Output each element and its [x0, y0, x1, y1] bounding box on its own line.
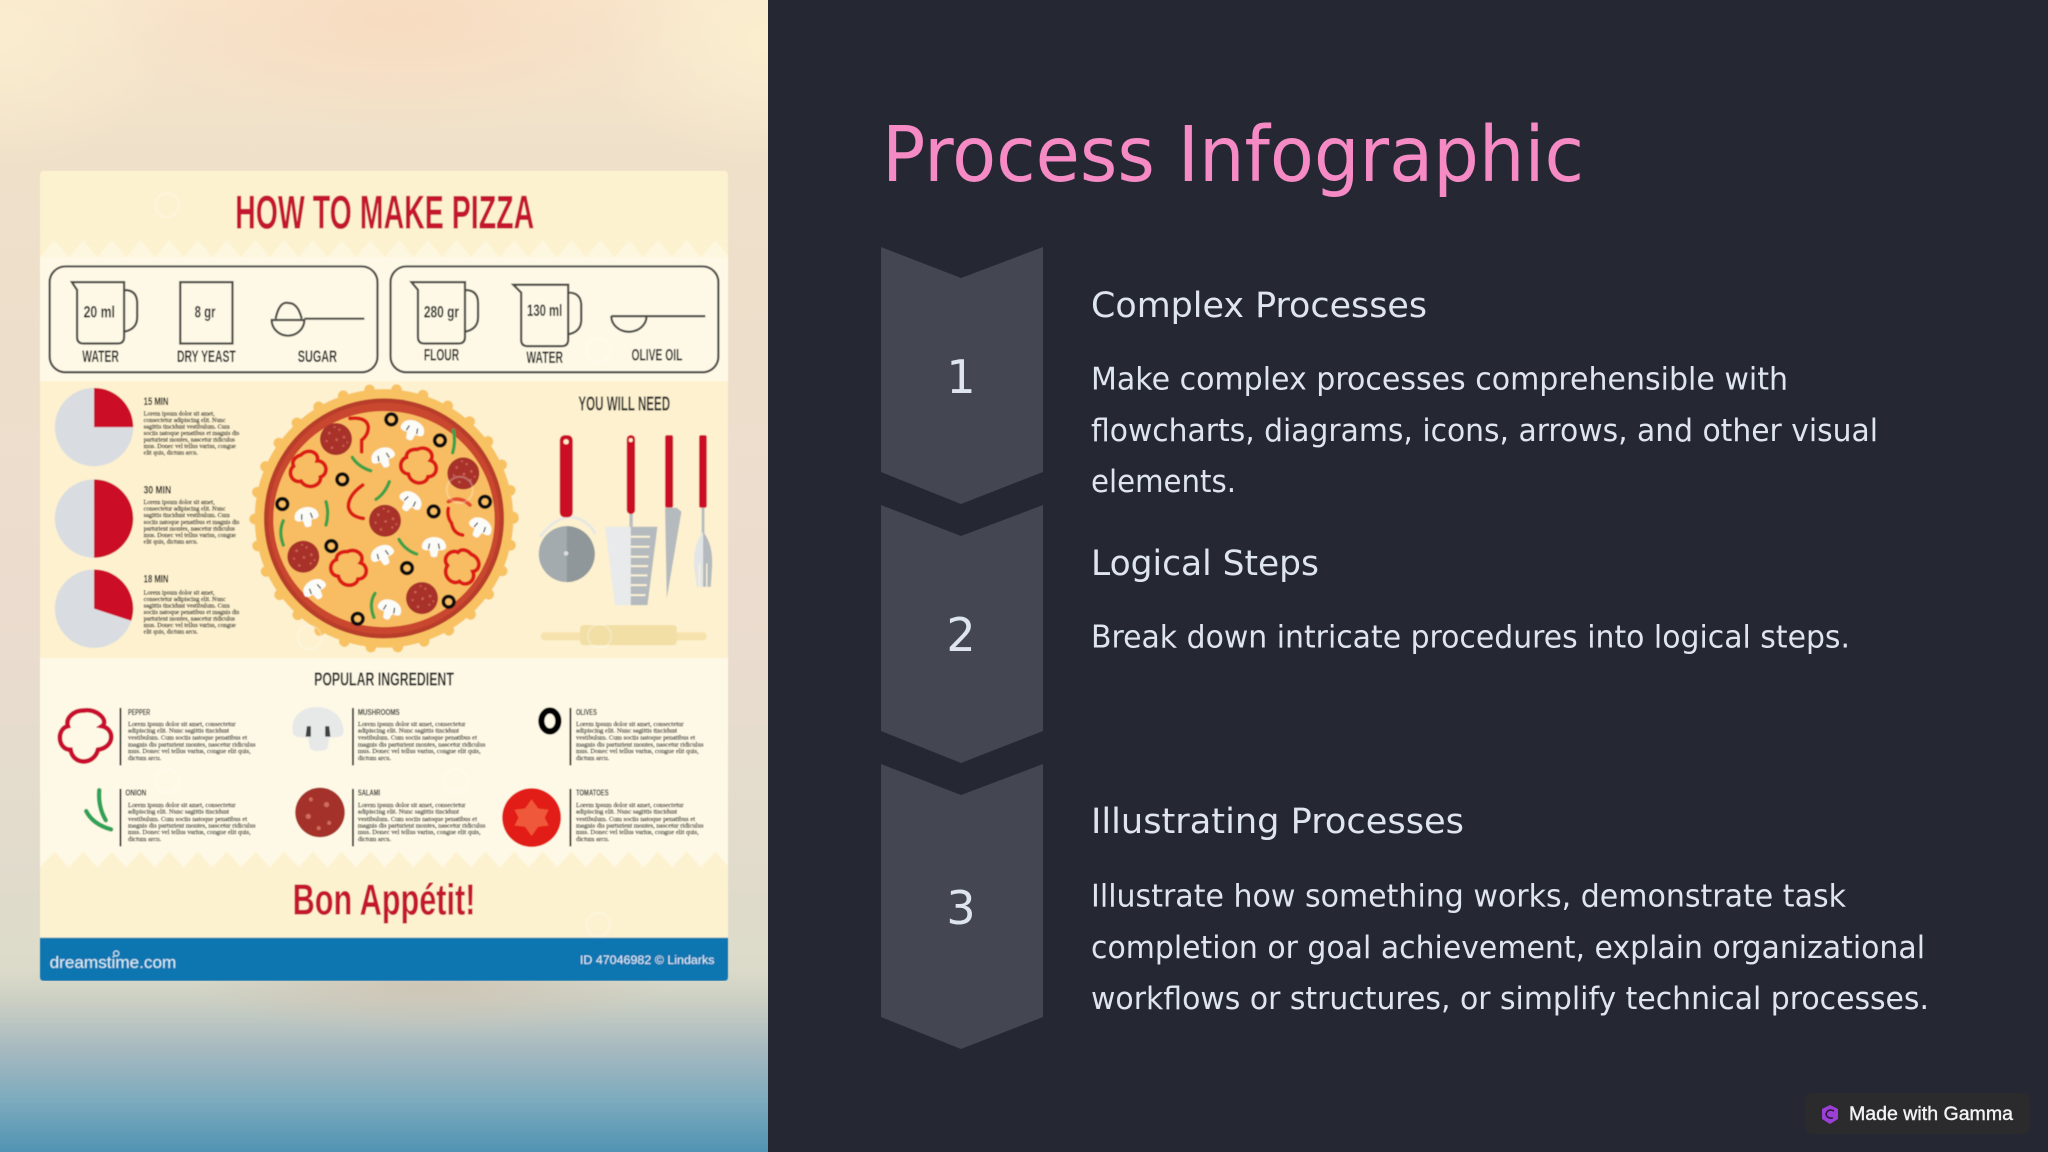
label: water 2: WATER [526, 349, 563, 367]
ingredient: onion [86, 787, 256, 846]
label: dry yeast: DRY YEAST [177, 348, 236, 366]
text: 18 min: mus. Donec vel tellus varius, congue [144, 622, 236, 629]
text: 30 min [144, 485, 240, 545]
ingredient: olives: Lorem ipsum dolor sit amet, consectetur [576, 721, 684, 728]
footer logo text: dreamstime.com [50, 954, 176, 972]
ingredient: onion: magnis dis parturient montes, nascetur ridiculus [128, 822, 256, 829]
closing text: bon appetit: Bon Appétit! [293, 876, 475, 924]
panel: process steps [881, 111, 2014, 1125]
text: 30 min: elit quis, dictum arcu. [144, 538, 198, 545]
step 1 [881, 247, 1878, 504]
ingredient: mushrooms: dictum arcu. [358, 755, 391, 762]
ingredient: salami [295, 787, 486, 846]
ingredient: pepper [60, 707, 256, 765]
body: step 3: completion or goal achievement, explain organizational [1091, 930, 1925, 966]
body: step 2: Break down intricate procedures into logical steps. [1091, 620, 1850, 656]
ingredient: pepper: Lorem ipsum dolor sit amet, consectetur [128, 721, 236, 728]
ingredient box: flour, water, olive oil [391, 266, 718, 372]
ingredient: onion: mus. Donec vel tellus varius, congue elit quis, [128, 829, 251, 836]
ingredient: olives: adipiscing elit. Nunc sagittis tincidunt [576, 728, 677, 735]
chevron 3 [881, 764, 1043, 1049]
text: 15 min: consectetur adipiscing elit. Nunc [144, 417, 226, 424]
watermarks [155, 193, 611, 936]
ingredient: onion: adipiscing elit. Nunc sagittis tincidunt [128, 809, 229, 816]
icon: spatula [605, 435, 657, 605]
icon: flour cup [411, 282, 478, 344]
text: 15 min: sagittis tincidunt vestibulum. Cum [144, 423, 230, 430]
badge text: Made with Gamma [1849, 1104, 2013, 1125]
ingredient: onion: vestibulum. Cum sociis natoque penatibus et [128, 816, 247, 823]
icon: yeast packet [180, 282, 232, 344]
text: 18 min: consectetur adipiscing elit. Nunc [144, 596, 226, 603]
ingredient box: water, yeast, sugar [50, 266, 377, 372]
illustration: pizza [255, 389, 513, 648]
label: sugar: SUGAR [298, 348, 337, 366]
label: 20 ml: 20 ml [84, 302, 115, 321]
icon: water cup [72, 282, 137, 344]
text: 30 min: sociis natoque penatibus et magnis dis [144, 519, 240, 526]
chevron 2 [881, 505, 1043, 763]
heading: you will need: YOU WILL NEED [578, 393, 670, 416]
ingredient: olives: mus. Donec vel tellus varius, congue elit quis, [576, 748, 699, 755]
ingredient: olives: dictum arcu. [576, 755, 610, 762]
ingredient: salami: SALAMI [358, 787, 380, 797]
ingredient: mushrooms: adipiscing elit. Nunc sagittis tincidunt [358, 728, 459, 735]
image background bands [40, 171, 728, 981]
ingredient: tomatoes: TOMATOES [576, 787, 609, 797]
ingredient: mushrooms: magnis dis parturient montes, nascetur ridiculus [358, 741, 486, 748]
text: 15 min: Lorem ipsum dolor sit amet, [144, 410, 215, 417]
ingredient: salami: mus. Donec vel tellus varius, congue elit quis, [358, 829, 481, 836]
icon: sugar spoon [272, 303, 364, 336]
ingredient: onion: Lorem ipsum dolor sit amet, consectetur [128, 802, 236, 809]
chevron 1 [881, 247, 1043, 504]
panel: blurred image background [0, 0, 768, 1152]
text: 30 min: 30 MIN [144, 485, 171, 497]
heading: illustrating processes: Illustrating Processes [1091, 802, 1464, 842]
body: step 3: Illustrate how something works, demonstrate task [1091, 878, 1846, 914]
text: 15 min [144, 396, 240, 457]
ingredient: tomatoes: magnis dis parturient montes, nascetur ridiculus [576, 822, 704, 829]
number 1: 1 [946, 350, 976, 404]
ingredient: olives [541, 707, 704, 765]
icon: rolling pin [541, 625, 707, 645]
ingredient: olives: vestibulum. Cum sociis natoque penatibus et [576, 734, 695, 741]
text: 15 min: mus. Donec vel tellus varius, congue [144, 443, 236, 450]
time charts [55, 388, 240, 648]
ingredient: mushrooms: MUSHROOMS [358, 707, 400, 717]
body: step 3: workflows or structures, or simplify technical processes. [1091, 981, 1929, 1017]
ingredient: tomatoes: mus. Donec vel tellus varius, congue elit quis, [576, 829, 699, 836]
ingredient: pepper: mus. Donec vel tellus varius, congue elit quis, [128, 748, 251, 755]
ingredient: tomatoes: Lorem ipsum dolor sit amet, consectetur [576, 802, 684, 809]
text: 18 min: elit quis, dictum arcu. [144, 628, 198, 635]
label: 8 gr: 8 gr [195, 302, 216, 321]
icon: gamma logo [1822, 1105, 1838, 1124]
body: step 1: elements. [1091, 464, 1236, 500]
section: popular ingredient [60, 669, 704, 847]
label: flour: FLOUR [424, 346, 459, 364]
icon: water cup 2 [513, 285, 581, 346]
badge: made with gamma [1805, 1093, 2030, 1134]
text: 30 min: Lorem ipsum dolor sit amet, [144, 499, 215, 506]
label: 280 gr: 280 gr [424, 302, 459, 321]
footer image id: ID 47046982 © Lindarks [580, 953, 714, 967]
ingredient: mushrooms: mus. Donec vel tellus varius, congue elit quis, [358, 748, 481, 755]
ingredient: salami: magnis dis parturient montes, nascetur ridiculus [358, 822, 486, 829]
ingredient: tomatoes [502, 787, 704, 847]
text: 15 min: 15 MIN [144, 396, 168, 408]
image title: HOW TO MAKE PIZZA [235, 186, 534, 239]
heading: popular ingredient: POPULAR INGREDIENT [314, 669, 454, 690]
ingredient: pepper: dictum arcu. [128, 755, 162, 762]
ingredient: olives: magnis dis parturient montes, nascetur ridiculus [576, 741, 704, 748]
ingredient: salami: adipiscing elit. Nunc sagittis tincidunt [358, 809, 459, 816]
text: 30 min: consectetur adipiscing elit. Nunc [144, 506, 226, 513]
ingredient: salami: Lorem ipsum dolor sit amet, consectetur [358, 802, 466, 809]
tools section [539, 393, 712, 645]
label: olive oil: OLIVE OIL [632, 346, 682, 364]
text: 18 min: Lorem ipsum dolor sit amet, [144, 589, 215, 596]
step 2 [881, 505, 1850, 763]
footer logo mark [114, 951, 119, 956]
ingredient: pepper: magnis dis parturient montes, nascetur ridiculus [128, 741, 256, 748]
ingredient: onion: dictum arcu. [128, 836, 162, 843]
ingredient: olives: OLIVES [576, 707, 597, 717]
pie: 30 min [55, 479, 133, 558]
ingredient: pepper: adipiscing elit. Nunc sagittis tincidunt [128, 728, 229, 735]
ingredient: tomatoes: dictum arcu. [576, 836, 610, 843]
text: 18 min [144, 574, 240, 635]
body: step 1: flowcharts, diagrams, icons, arrows, and other visual [1091, 413, 1878, 449]
text: 15 min: elit quis, dictum arcu. [144, 450, 198, 457]
ingredient: mushrooms: vestibulum. Cum sociis natoque penatibus et [358, 734, 477, 741]
ingredient: tomatoes: adipiscing elit. Nunc sagittis tincidunt [576, 809, 677, 816]
icon: pizza cutter [539, 435, 595, 582]
pie: 15 min [55, 388, 133, 466]
pie: 18 min [55, 569, 133, 648]
label: 130 ml: 130 ml [527, 301, 562, 320]
text: 30 min: sagittis tincidunt vestibulum. Cum [144, 512, 230, 519]
ingredient: salami: vestibulum. Cum sociis natoque penatibus et [358, 816, 477, 823]
text: 30 min: mus. Donec vel tellus varius, congue [144, 532, 236, 539]
text: 18 min: sociis natoque penatibus et magnis dis [144, 609, 240, 616]
text: 18 min: 18 MIN [144, 574, 168, 586]
label: water: WATER [82, 348, 119, 366]
ingredient: tomatoes: vestibulum. Cum sociis natoque penatibus et [576, 816, 695, 823]
ingredient: pepper: PEPPER [128, 707, 150, 717]
text: 15 min: sociis natoque penatibus et magnis dis [144, 430, 240, 437]
body: step 1 [1091, 362, 1878, 500]
icon: fork [694, 435, 712, 587]
ingredient: mushrooms [292, 707, 486, 765]
text: 30 min: parturient montes, nascetur ridiculus [144, 525, 236, 532]
icon: knife [665, 435, 681, 598]
body: step 1: Make complex processes comprehensible with [1091, 362, 1788, 398]
ingredient: mushrooms: Lorem ipsum dolor sit amet, consectetur [358, 721, 466, 728]
footer bar [40, 938, 728, 981]
step 3 [881, 764, 1929, 1049]
text: 18 min: sagittis tincidunt vestibulum. Cum [144, 602, 230, 609]
text: 15 min: parturient montes, nascetur ridiculus [144, 436, 236, 443]
title: Process Infographic [882, 111, 1584, 200]
heading: complex processes: Complex Processes [1091, 286, 1427, 326]
number 3: 3 [946, 881, 976, 935]
body: step 3 [1091, 878, 1929, 1017]
ingredient: onion: ONION [125, 787, 146, 797]
number 2: 2 [946, 608, 976, 662]
ingredient: pepper: vestibulum. Cum sociis natoque penatibus et [128, 734, 247, 741]
ingredient: salami: dictum arcu. [358, 836, 391, 843]
text: 18 min: parturient montes, nascetur ridiculus [144, 615, 236, 622]
heading: logical steps: Logical Steps [1091, 544, 1319, 584]
icon: olive oil spoon [611, 316, 705, 332]
